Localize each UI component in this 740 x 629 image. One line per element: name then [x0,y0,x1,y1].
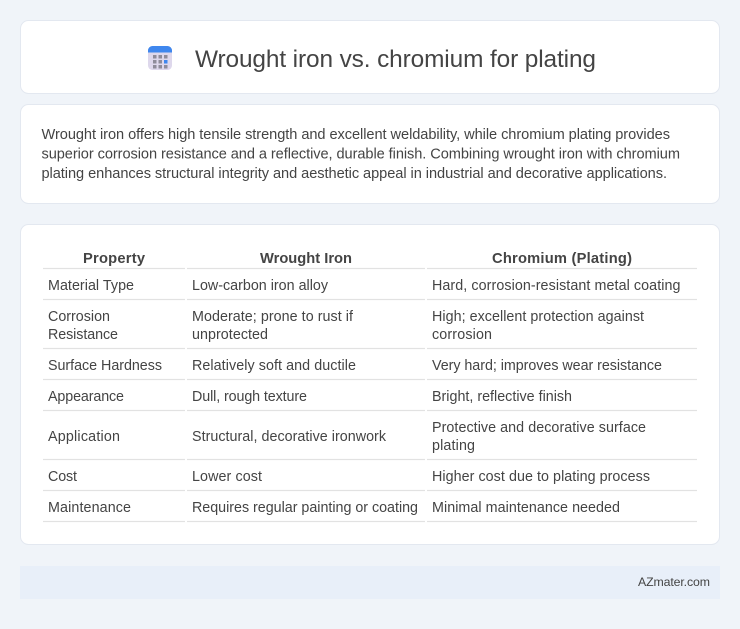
row: cost [48,469,650,485]
row: appearance: Dull, rough texture [192,389,307,405]
row: surface hardness: Relatively soft and ductile [192,358,356,374]
footer [20,566,720,599]
panel: summary [20,104,720,204]
row: cost: Lower cost [192,469,262,485]
table rules [43,268,697,522]
title text: Wrought iron vs. chromium for plating [195,46,596,73]
row: appearance: Bright, reflective finish [432,389,572,405]
summary text: superior corrosion resistance and a reflective, durable finish. Combining wrought iron with chromium [42,146,680,162]
row: application: plating [432,438,475,454]
row: corrosion resistance: corrosion [432,327,492,343]
table header [83,251,632,267]
row: material type: Hard, corrosion-resistant metal coating [432,278,681,294]
row: corrosion resistance: Corrosion [48,309,110,325]
footer text: AZmater.com [638,575,710,589]
row: application: Structural, decorative ironwork [192,429,387,445]
row: corrosion resistance: unprotected [192,327,268,343]
row: maintenance: Requires regular painting or coating [192,500,418,516]
table header: Wrought Iron [260,251,352,267]
row: maintenance: Maintenance [48,500,131,516]
row: application: Application [48,429,120,445]
panel: title [20,20,720,94]
row: application [48,420,646,454]
table header: Chromium (Plating) [492,251,632,267]
summary text [42,127,680,182]
row: corrosion resistance: Moderate; prone to rust if [192,309,353,325]
row: corrosion resistance: Resistance [48,327,118,343]
row: application: Protective and decorative surface [432,420,646,436]
row: cost: Cost [48,469,77,485]
row: cost: Higher cost due to plating process [432,469,650,485]
row: appearance: Appearance [48,389,124,405]
summary text: Wrought iron offers high tensile strength and excellent weldability, while chromium plating provides [42,127,670,143]
row: maintenance [48,500,620,516]
row: appearance [48,389,572,405]
row: corrosion resistance [48,309,644,343]
icon: calendar [148,46,172,70]
row: surface hardness: Surface Hardness [48,358,162,374]
row: corrosion resistance: High; excellent protection against [432,309,644,325]
row: material type: Low-carbon iron alloy [192,278,329,294]
table header: Property [83,251,146,267]
row: maintenance: Minimal maintenance needed [432,500,620,516]
row: surface hardness: Very hard; improves wear resistance [432,358,662,374]
panel: comparison table [20,224,720,544]
row: surface hardness [48,358,662,374]
summary text: plating enhances structural integrity and aesthetic appeal in industrial and decorative applications. [42,166,667,182]
row: material type: Material Type [48,278,134,294]
row: material type [48,278,681,294]
